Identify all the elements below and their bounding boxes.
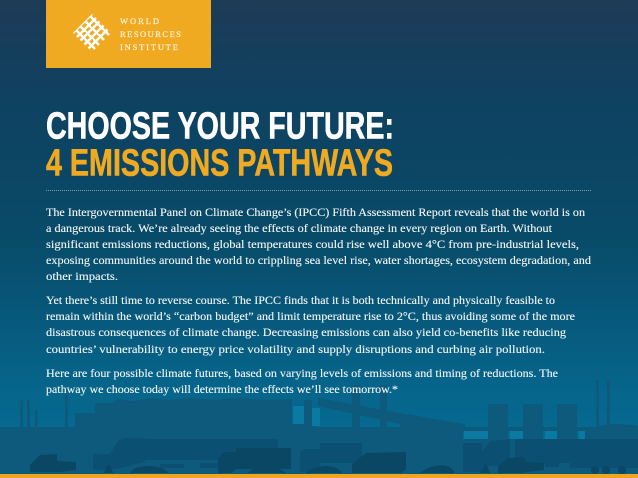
logo wordmark: INSTITUTE [120,42,178,52]
light strips behind buildings [293,406,585,439]
vehicle: pickup right [498,457,544,473]
paragraph: still time to reverse course: Yet there’s still time to reverse course. The IPCC finds that it is both technically and physically feasible to [46,294,555,307]
paragraph: still time to reverse course: disastrous consequences of climate change. Decreasing emissions can also yield co-benefits like reducing [46,326,566,339]
paragraph: IPCC findings [46,206,591,283]
logo wordmark: RESOURCES [120,29,181,39]
title: 4 EMISSIONS PATHWAYS [46,142,393,184]
icon: WRI woven knot logo [73,14,110,50]
paragraph: still time to reverse course [46,294,575,356]
vehicle: truck two [218,448,291,473]
factory mass [0,398,638,475]
logo wordmark: WORLD [120,16,159,26]
paragraph: four possible climate futures [46,367,558,396]
vehicle: pickup left [30,454,76,472]
paragraph: IPCC findings: The Intergovernmental Panel on Climate Change’s (IPCC) Fifth Assessment Report reveals that the world is on [46,206,585,219]
illustration: industrial skyline with vehicles [0,380,638,475]
bottom yellow stripe [0,474,638,478]
paragraph: IPCC findings: other impacts. [46,270,118,283]
paragraph: four possible climate futures: Here are four possible climate futures, based on varying levels of emissions and timing of reductions. The [46,367,558,380]
logo panel [46,0,211,68]
title [46,106,394,184]
title: CHOOSE YOUR FUTURE: [46,106,394,148]
paragraph: still time to reverse course: countries’ vulnerability to energy price volatility and supply disruptions and curbing air pollution. [46,343,545,356]
paragraph: IPCC findings: a dangerous track. We’re already seeing the effects of climate change in every region on Earth. Without [46,222,553,235]
vehicles [30,448,626,474]
paragraph: still time to reverse course: remain within the world’s “carbon budget” and limit temperature rise to 2°C, thus avoiding some of the more [46,310,575,323]
background chimneys and bridge [20,380,638,445]
paragraph: IPCC findings: significant emissions reductions, global temperatures could rise well above 4°C from pre-industrial levels, [46,238,579,251]
logo wordmark [120,16,181,52]
vehicle: van [352,452,406,473]
paragraph: four possible climate futures: pathway we choose today will determine the effects we’ll see tomorrow.* [46,383,398,396]
trailers and truck bodies [93,438,638,472]
paragraph: IPCC findings: exposing communities around the world to crippling sea level rise, water shortages, ecosystem degradation, and [46,254,591,267]
